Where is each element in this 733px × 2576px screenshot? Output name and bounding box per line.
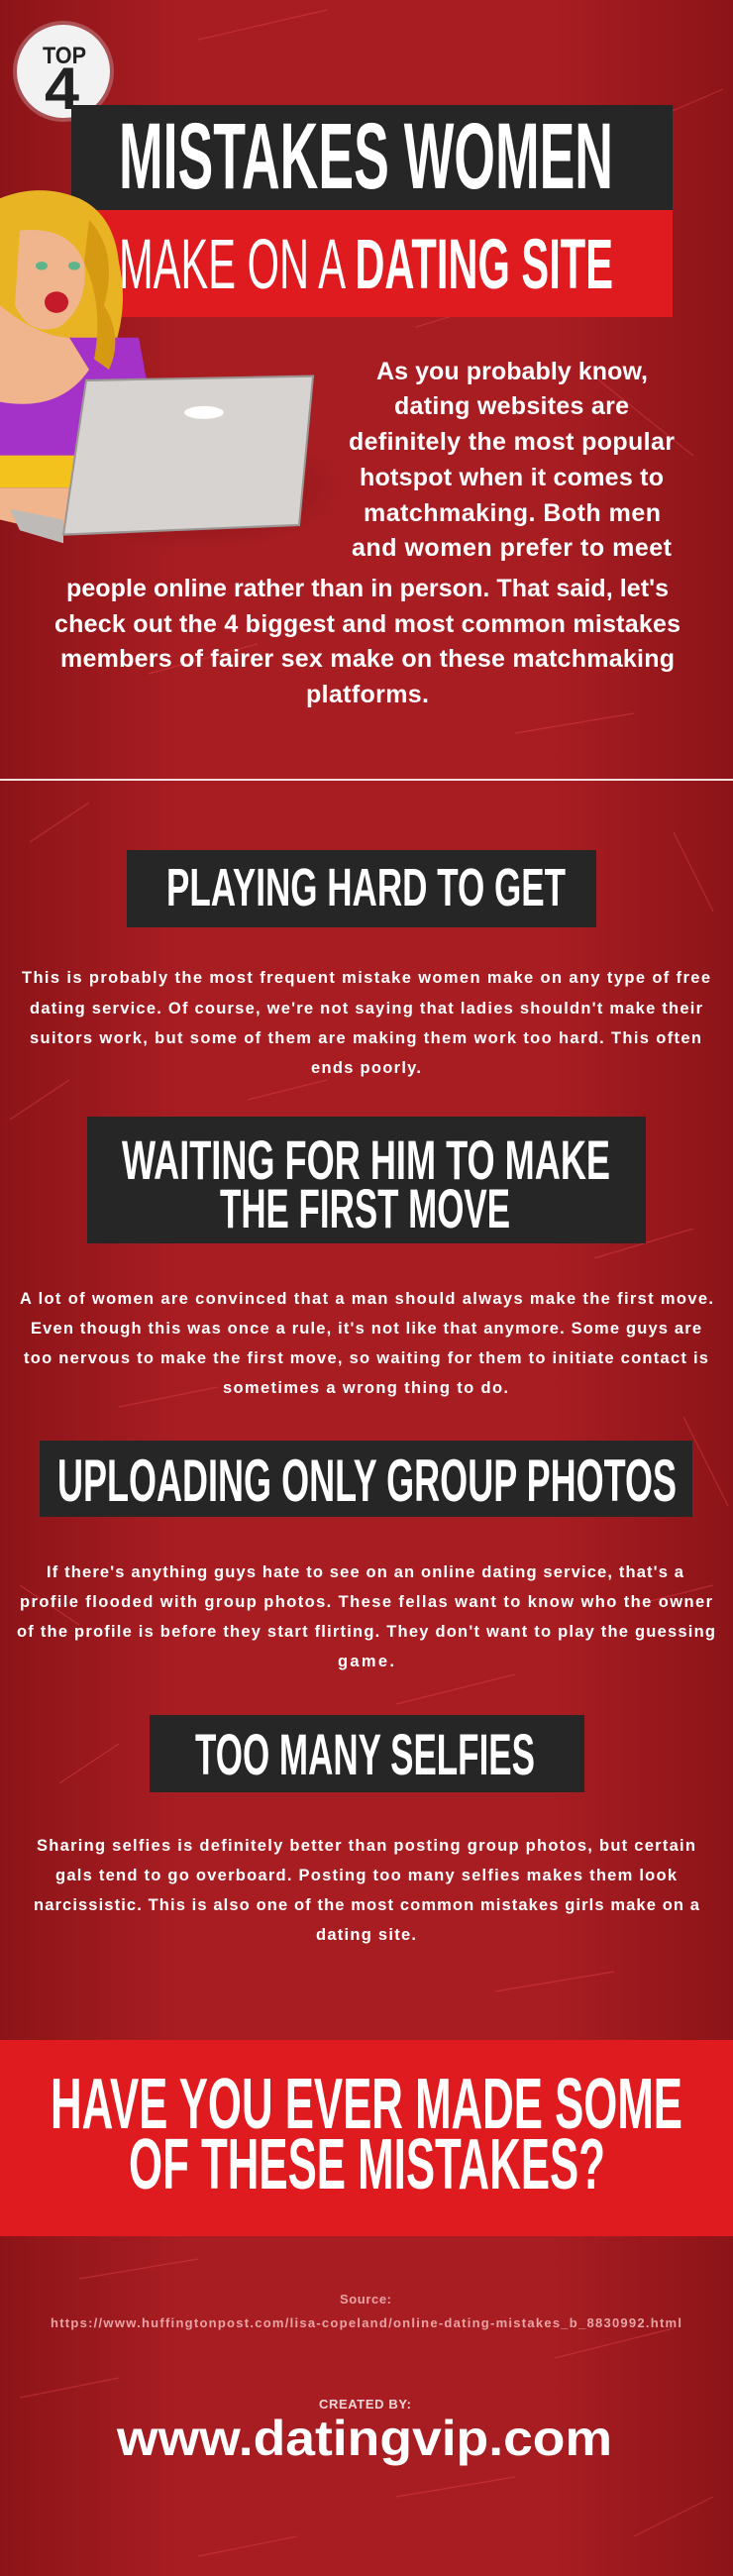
text: waiting for him: Even though this was once a rule, it's not like that anymore. Some guys are bbox=[31, 1320, 701, 1338]
source bbox=[51, 2292, 681, 2330]
credit: www.datingvip.com bbox=[116, 2411, 612, 2466]
banner: question bbox=[0, 2040, 733, 2236]
intro text: check out the 4 biggest and most common mistakes bbox=[54, 610, 681, 638]
text: group photos: If there's anything guys hate to see on an online dating service, that's a bbox=[47, 1563, 684, 1581]
intro text: definitely the most popular bbox=[349, 428, 675, 456]
text: playing hard to get: dating service. Of course, we're not saying that ladies shouldn't make their bbox=[30, 1000, 703, 1018]
text: waiting for him: sometimes a wrong thing to do. bbox=[223, 1379, 508, 1397]
badge: top 4: 4 bbox=[45, 55, 80, 122]
text: waiting for him: too nervous to make the first move, so waiting for them to initiate contact is bbox=[24, 1349, 708, 1367]
intro text: platforms. bbox=[306, 681, 429, 708]
intro text bbox=[54, 358, 681, 708]
source: Source: bbox=[340, 2292, 391, 2307]
intro text: As you probably know, bbox=[376, 358, 648, 385]
heading: playing hard to get bbox=[127, 850, 596, 927]
illustration: woman with laptop bbox=[0, 190, 347, 552]
source: https://www.huffingtonpost.com/lisa-copeland/online-dating-mistakes_b_8830992.html bbox=[51, 2315, 681, 2330]
text: group photos: game. bbox=[338, 1653, 394, 1670]
intro text: dating websites are bbox=[394, 392, 629, 420]
text: waiting for him: A lot of women are convinced that a man should always make the first move. bbox=[20, 1290, 713, 1308]
intro text: matchmaking. Both men bbox=[364, 499, 661, 527]
badge: top 4 bbox=[13, 21, 114, 122]
intro text: members of fairer sex make on these matchmaking bbox=[60, 645, 675, 673]
title bbox=[71, 104, 673, 317]
text: selfies: Sharing selfies is definitely better than posting group photos, but certain bbox=[37, 1837, 695, 1855]
text: selfies: narcissistic. This is also one of the most common mistakes girls make on a bbox=[34, 1896, 700, 1914]
heading: selfies bbox=[150, 1715, 584, 1792]
text: waiting for him bbox=[20, 1290, 713, 1397]
text: selfies: dating site. bbox=[316, 1926, 416, 1944]
heading: waiting for him: THE FIRST MOVE bbox=[220, 1177, 510, 1239]
text: playing hard to get: ends poorly. bbox=[311, 1059, 421, 1077]
text: playing hard to get: suitors work, but some of them are making them work too hard. This often bbox=[30, 1029, 701, 1047]
text: playing hard to get: This is probably the most frequent mistake women make on any type of free bbox=[22, 969, 710, 987]
text: group photos bbox=[17, 1563, 715, 1670]
badge: top 4: TOP bbox=[43, 43, 86, 69]
text: selfies: gals tend to go overboard. Posting too many selfies makes them look bbox=[55, 1867, 678, 1884]
text: group photos: profile flooded with group photos. These fellas want to know who the owner bbox=[20, 1593, 713, 1611]
intro text: and women prefer to meet bbox=[352, 534, 673, 562]
intro text: people online rather than in person. That said, let's bbox=[66, 575, 669, 602]
text: selfies bbox=[34, 1837, 700, 1944]
heading: waiting for him bbox=[87, 1117, 646, 1243]
text: group photos: of the profile is before they start flirting. They don't want to play the guessing bbox=[17, 1623, 715, 1641]
text: playing hard to get bbox=[22, 969, 710, 1077]
credit: CREATED BY: bbox=[319, 2397, 411, 2412]
intro text: hotspot when it comes to bbox=[360, 464, 664, 491]
